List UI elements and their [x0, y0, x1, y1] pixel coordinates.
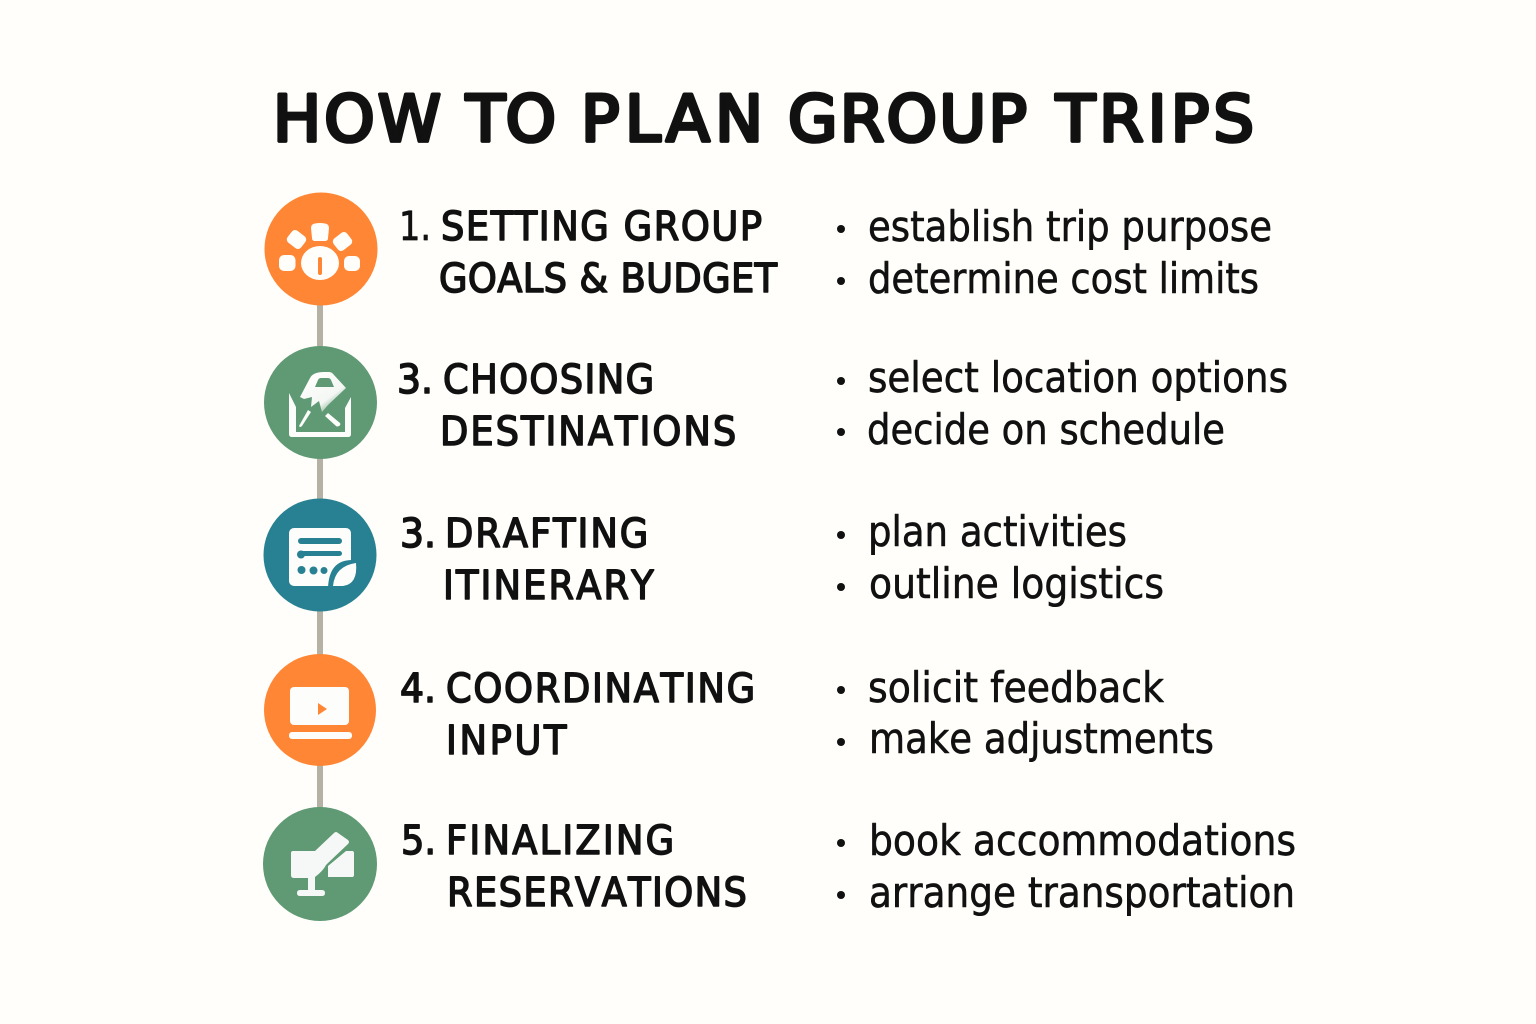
heading: step 5: 5.	[401, 818, 436, 864]
icon: coordinating input	[264, 654, 376, 766]
icon: drafting itinerary	[264, 498, 376, 612]
heading: step 5: RESERVATIONS	[447, 870, 747, 916]
title: HOW	[273, 83, 441, 157]
title: GROUP	[788, 83, 1027, 157]
heading: step 1	[399, 204, 778, 302]
timeline connector	[317, 300, 323, 820]
step 5	[263, 807, 1296, 921]
heading: step 3	[400, 511, 654, 609]
heading: step 1: 1.	[399, 204, 431, 250]
heading: step 1: SETTING GROUP	[441, 204, 762, 250]
bullets: step 3: plan activities	[868, 507, 1127, 556]
heading: step 2	[397, 357, 736, 455]
heading: step 2: 3.	[397, 357, 433, 403]
heading: step 4: COORDINATING	[446, 666, 755, 712]
bullets: step 5	[837, 816, 1296, 917]
heading: step 1: GOALS & BUDGET	[439, 256, 778, 302]
bullets: step 3: outline logistics	[869, 559, 1164, 608]
bullets: step 1: determine cost limits	[868, 254, 1259, 303]
bullets: step 5: arrange transportation	[869, 868, 1295, 917]
bullets: step 4	[837, 663, 1214, 763]
step 3	[264, 498, 1164, 612]
bullets: step 2: select location options	[868, 353, 1288, 402]
bullets: step 3	[837, 507, 1164, 608]
bullets: step 5: book accommodations	[869, 816, 1296, 865]
heading: step 2: CHOOSING	[443, 357, 654, 403]
heading: step 3: ITINERARY	[443, 563, 654, 609]
bullets: step 4: make adjustments	[869, 714, 1214, 763]
heading: step 4	[400, 666, 755, 764]
bullets: step 4: solicit feedback	[868, 663, 1165, 712]
icon: finalizing reservations	[263, 807, 377, 921]
step 4	[264, 654, 1214, 766]
heading: step 2: DESTINATIONS	[440, 409, 736, 455]
bullets: step 1: establish trip purpose	[868, 202, 1272, 251]
bullets: step 2	[837, 353, 1288, 454]
heading: step 5	[401, 818, 747, 916]
title	[273, 83, 1254, 157]
icon: choosing destinations	[264, 346, 377, 459]
heading: step 4: INPUT	[446, 718, 567, 764]
title: TRIPS	[1055, 83, 1254, 157]
step 2	[264, 346, 1288, 459]
title: PLAN	[581, 83, 763, 157]
heading: step 4: 4.	[400, 666, 436, 712]
title: TO	[465, 83, 556, 157]
heading: step 3: 3.	[400, 511, 436, 557]
heading: step 3: DRAFTING	[445, 511, 648, 557]
heading: step 5: FINALIZING	[446, 818, 674, 864]
icon: goals and budget	[264, 192, 378, 306]
bullets: step 2: decide on schedule	[867, 405, 1225, 454]
step 1	[264, 192, 1272, 306]
bullets: step 1	[837, 202, 1272, 303]
